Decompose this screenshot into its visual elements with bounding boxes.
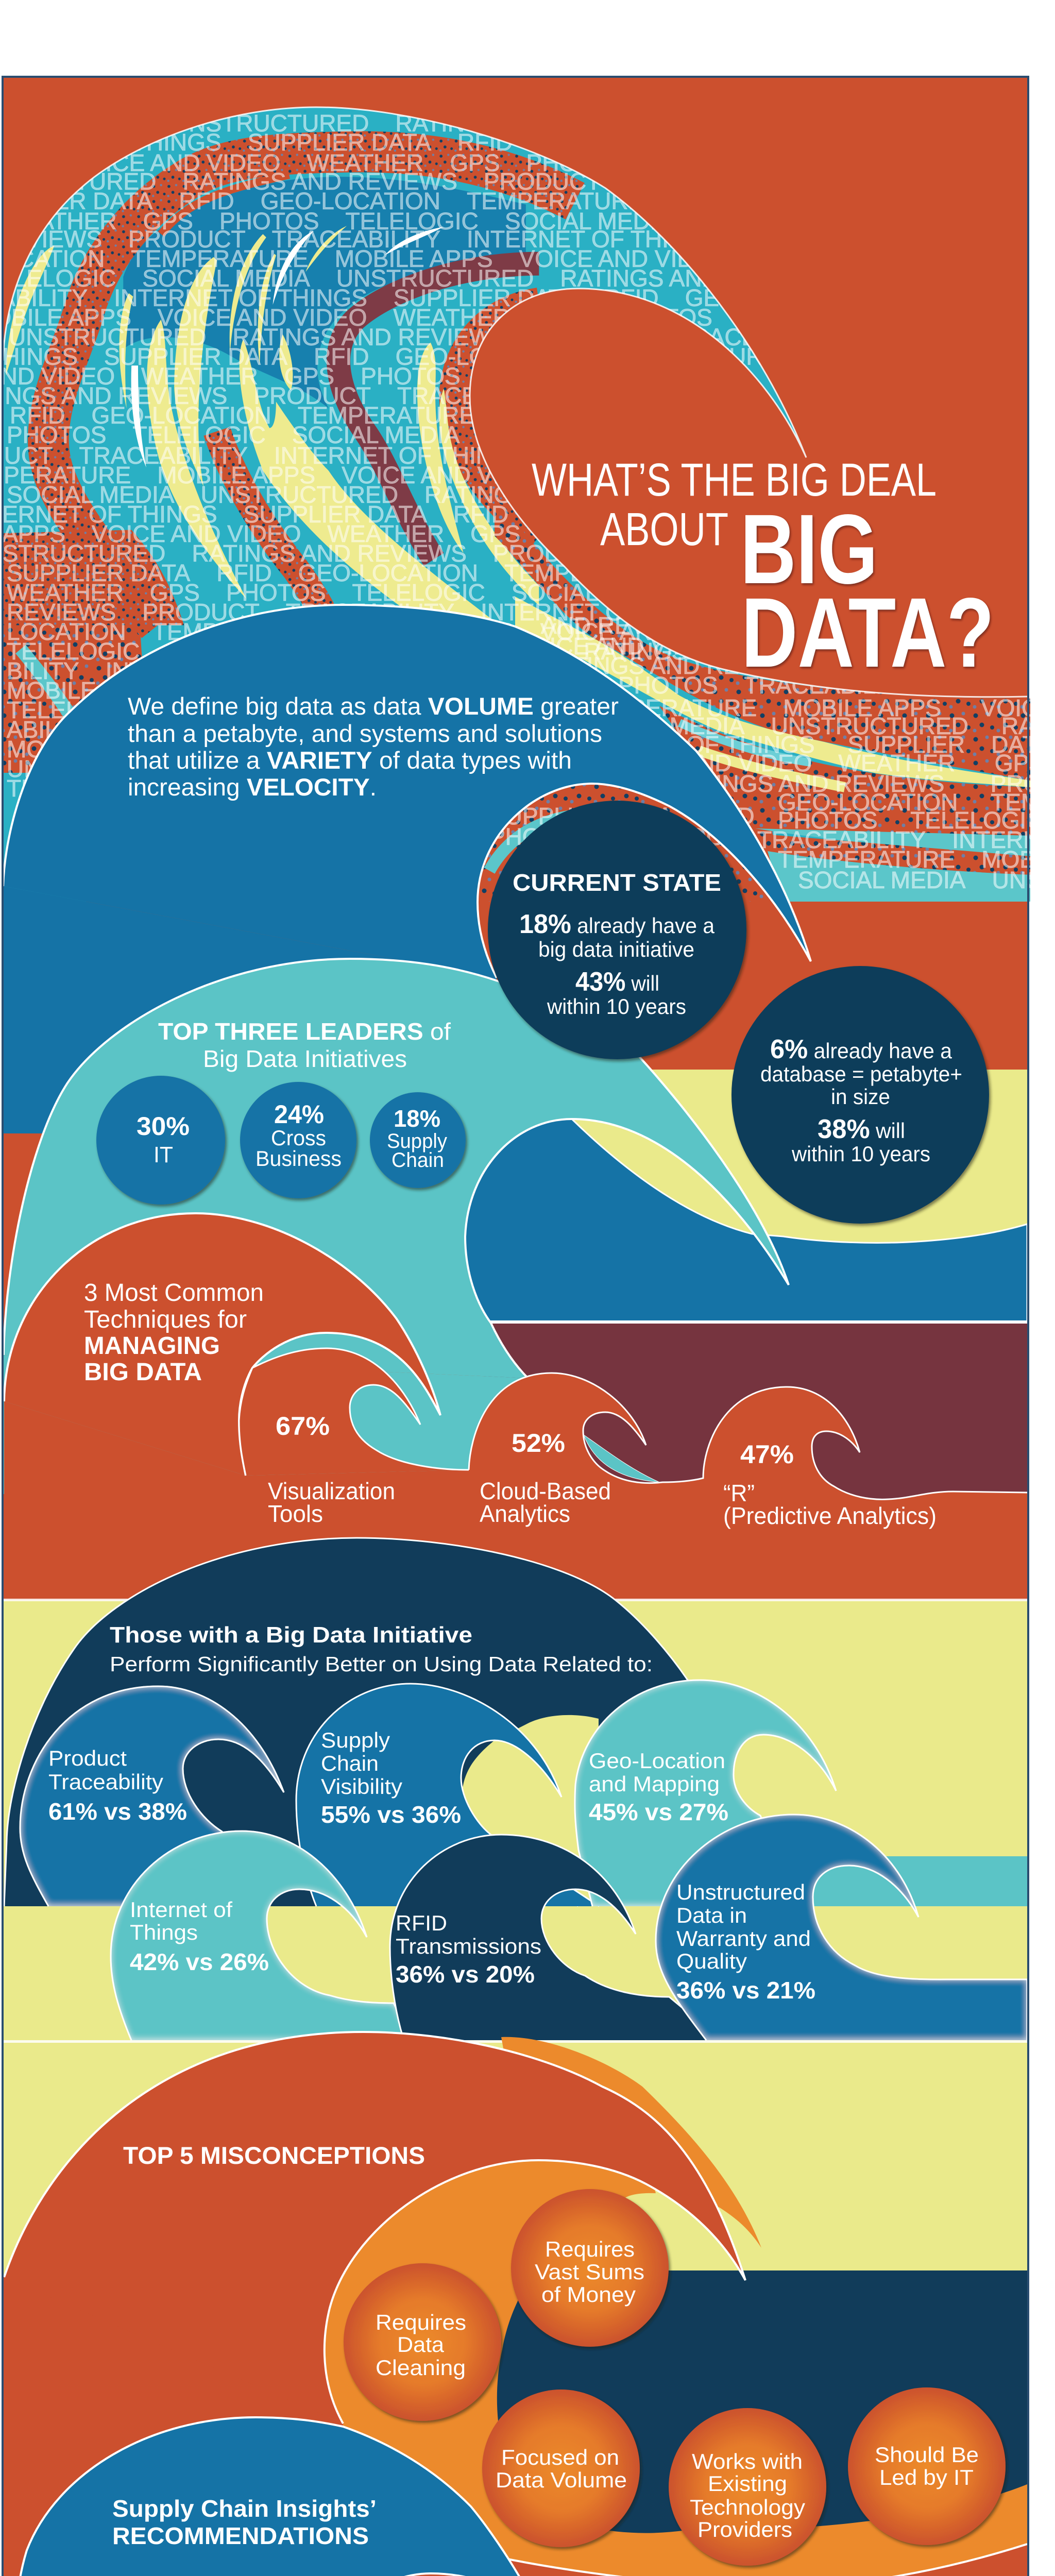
- circle: petabyte database: within 10 years: [791, 1142, 930, 1166]
- wave: geo-location: and Mapping: [589, 1772, 720, 1796]
- wave: product traceability: [20, 1686, 284, 1906]
- wave: product traceability: 61% vs 38%: [48, 1798, 187, 1825]
- data words flowing through the wave: TELELOGIC SOCIAL: [7, 697, 253, 723]
- maroon band: [484, 1320, 1027, 1502]
- data words flowing through the wave: REVIEWS PRODUCT TRACEABILITY INTERNET OF THINGS SUPPLIER: [7, 599, 877, 625]
- yellow crest behind waves: [462, 1715, 599, 1906]
- wave: internet of things: [111, 1831, 412, 2040]
- navy initiative wave: [4, 1538, 721, 1906]
- data words flowing through the wave: UNSTRUCTURED RATINGS AND REVIEWS PRODUCT TRACEABILITY: [9, 324, 846, 350]
- data words flowing through the wave: PHOTOS TELELOGIC: [489, 823, 748, 850]
- sphere: requires vast sums of money: [511, 2189, 669, 2347]
- wave: unstructured data: Quality: [676, 1949, 747, 1973]
- circle: cross business: Business: [256, 1146, 342, 1171]
- sphere: requires vast sums of money: of Money: [541, 2282, 636, 2307]
- waves: cloud-based analytics and R: Cloud-Based: [480, 1478, 611, 1504]
- techniques heading: Techniques for: [84, 1306, 247, 1333]
- data words flowing through the wave: RFID GEO-LOCATION TEMPERATURE MOBILE APPS: [10, 402, 659, 429]
- circle: current state: 18% already have a: [519, 909, 715, 939]
- definition text: that utilize a VARIETY of data types with: [128, 747, 572, 774]
- sphere: requires data cleaning: [344, 2263, 501, 2421]
- data words flowing through the wave: VOICE AND VIDEO WEATHER GPS: [603, 750, 1045, 776]
- wave: visualization tools: [239, 1348, 469, 1600]
- techniques heading: MANAGING: [84, 1332, 220, 1360]
- sphere: works with existing technology providers: Technology: [690, 2495, 805, 2519]
- recommendations heading: [112, 2495, 377, 2549]
- initiative heading: Perform Significantly Better on Using Data Related to:: [110, 1652, 653, 1676]
- data words flowing through the wave: UNSTRUCTURED RATINGS AND REVIEWS: [172, 110, 670, 137]
- waves: cloud-based analytics and R: “R”: [723, 1480, 755, 1506]
- red lower band: [3, 2421, 1027, 2576]
- data words flowing through the wave: UNSTRUCTURED: [7, 755, 204, 782]
- sphere: requires vast sums of money: Requires: [545, 2237, 635, 2261]
- initiative heading: Those with a Big Data Initiative: [110, 1622, 472, 1648]
- wave: geo-location: Geo-Location: [589, 1749, 725, 1773]
- data words flowing through the wave: WEATHER GPS PHOTOS TELELOGIC SOCIAL MEDIA UNSTRUCTURED: [0, 208, 896, 234]
- initiative heading: [110, 1622, 653, 1676]
- data words flowing through the wave: ABILITY: [7, 716, 95, 743]
- definition text: than a petabyte, and systems and solutions: [128, 720, 602, 747]
- red misconceptions wave: [4, 2032, 745, 2576]
- circle: supply chain: 18%: [394, 1105, 440, 1132]
- title: WHAT’S THE BIG DEAL: [532, 454, 937, 506]
- data words flowing through the wave: MOBILE APPS VOICE AND VIDEO: [7, 677, 400, 704]
- wave: unstructured data: Unstructured: [676, 1880, 805, 1904]
- teal leaders wave: [4, 959, 789, 1494]
- sphere: works with existing technology providers: [669, 2408, 826, 2566]
- wave: product traceability: Product: [48, 1746, 127, 1770]
- circle: petabyte database: [731, 966, 989, 1224]
- wave: RFID: [390, 1835, 721, 2040]
- waves: cloud-based analytics and R: Analytics: [480, 1500, 570, 1527]
- title: DATA?: [741, 577, 994, 688]
- data words flowing through the wave: TELELOGIC SOCIAL MEDIA UNSTRUCTURED RATINGS: [7, 638, 687, 665]
- data words flowing through the wave: BILITY INTERNET OF THINGS SUPPLIER DATA: [7, 657, 569, 684]
- data words flowing through the wave: PHOTOS TELELOGIC: [778, 807, 1044, 834]
- circle: cross business: 24%: [274, 1100, 324, 1129]
- circle: current state: within 10 years: [547, 994, 686, 1019]
- waves: cloud-based analytics and R: (Predictive Analytics): [723, 1502, 937, 1529]
- sphere: requires vast sums of money: Vast Sums: [535, 2260, 644, 2284]
- circle: petabyte database: database = petabyte+: [760, 1062, 962, 1086]
- wave: unstructured data: 36% vs 21%: [676, 1977, 815, 2004]
- waves: cloud-based analytics and R: 52%: [512, 1429, 565, 1458]
- wave: unstructured data: Warranty and: [676, 1926, 811, 1951]
- circle: current state: CURRENT STATE: [513, 869, 721, 896]
- circle: petabyte database: in size: [831, 1084, 890, 1109]
- wave: RFID: 36% vs 20%: [396, 1961, 535, 1988]
- data words flowing through the wave: TEMPERATURE MOBILE APPS VOICE: [580, 694, 1054, 721]
- data words flowing through the wave: SUPPLIER DATA RFID: [489, 803, 755, 829]
- data words flowing through the wave: SUPPLIER DATA RFID GEO-LOCATION TEMPERATURE MOBILE APPS: [7, 560, 866, 586]
- wave: unstructured data: Data in: [676, 1903, 747, 1927]
- techniques heading: BIG DATA: [84, 1359, 202, 1386]
- red and yellow bands behind the blue wave: [464, 902, 1027, 1070]
- circle: current state: [488, 801, 746, 1059]
- wave: supply chain visibility: 55% vs 36%: [321, 1801, 461, 1828]
- data words flowing through the wave: LOCATION TEMPERATURE MOBILE APPS VOICE AND VIDEO: [7, 618, 750, 645]
- orange wave: [309, 2138, 1027, 2576]
- blue definition wave: [3, 605, 811, 1133]
- wave: RFID: Transmissions: [396, 1934, 541, 1958]
- navy panel behind misconceptions: [489, 2270, 1027, 2559]
- definition text: [128, 692, 619, 801]
- sphere: requires data cleaning: Cleaning: [376, 2355, 466, 2380]
- wave: supply chain visibility: Supply: [321, 1728, 390, 1752]
- wave: product traceability: Traceability: [48, 1770, 163, 1794]
- data words flowing through the wave: THINGS: [7, 775, 96, 802]
- data words flowing through the wave: MOBILE APPS: [7, 736, 165, 762]
- title: BIG: [740, 494, 878, 604]
- circle: supply chain: Supply: [387, 1130, 447, 1153]
- wave: geo-location: 45% vs 27%: [589, 1799, 728, 1825]
- circle: petabyte database: 6% already have a: [770, 1035, 952, 1064]
- sphere: requires data cleaning: Data: [397, 2332, 445, 2357]
- leaders heading: Big Data Initiatives: [203, 1045, 407, 1072]
- recommendations heading: RECOMMENDATIONS: [112, 2522, 369, 2549]
- sphere: should be led by IT: [848, 2387, 1006, 2545]
- circle: cross business: [240, 1082, 356, 1198]
- data words flowing through the wave: AND VIDEO WEATHER GPS PHOTOS TELELOGIC: [0, 363, 620, 389]
- data words flowing through the wave: SOCIAL MEDIA UNSTRUCTURED RATINGS AND REVIEWS PRODUCT: [7, 481, 843, 508]
- circle: current state: 43% will: [575, 967, 659, 997]
- hero wave made of data words: [0, 103, 1055, 907]
- sphere: should be led by IT: Led by IT: [879, 2465, 974, 2489]
- definition text: We define big data as data VOLUME greater: [128, 692, 619, 720]
- data words flowing through the wave: INTERNET OF THINGS SUPPLIER DATA: [561, 731, 1051, 758]
- circle: petabyte database: 38% will: [818, 1114, 905, 1144]
- circle: IT: IT: [154, 1142, 173, 1167]
- leaders heading: TOP THREE LEADERS of: [158, 1018, 451, 1045]
- data words flowing through the wave: VOICE AND VIDEO WEATHER GPS PHOTOS TELELOGIC: [71, 149, 785, 176]
- data words flowing through the wave: TELELOGIC SOCIAL MEDIA UNSTRUCTURED RATINGS AND REVIEWS: [0, 265, 835, 292]
- sphere: should be led by IT: Should Be: [875, 2443, 979, 2467]
- definition text: increasing VELOCITY.: [128, 773, 377, 801]
- circle: supply chain: [370, 1092, 466, 1188]
- wave: unstructured data: [656, 1815, 1027, 2040]
- wave: internet of things: Things: [130, 1920, 198, 1944]
- wave: supply chain visibility: [296, 1684, 599, 1906]
- wave: visualization tools: 67%: [276, 1412, 330, 1440]
- title: ABOUT: [600, 504, 728, 555]
- waves: cloud-based analytics and R: 47%: [740, 1440, 794, 1469]
- orange crest sliver: [501, 2037, 761, 2248]
- hero wave outline: [3, 107, 1027, 697]
- sphere: focused on data volume: Data Volume: [496, 2468, 627, 2492]
- data words flowing through the wave: THINGS SUPPLIER DATA RFID GEO-LOCATION TEMPERATURE: [0, 343, 779, 370]
- circle: cross business: Cross: [271, 1126, 326, 1150]
- sphere: focused on data volume: Focused on: [501, 2445, 619, 2469]
- sphere: works with existing technology providers: Existing: [708, 2471, 787, 2496]
- sphere: works with existing technology providers: Providers: [697, 2517, 792, 2541]
- sphere: requires data cleaning: Requires: [376, 2310, 466, 2334]
- data words flowing through the wave: AND REVIEWS PRODUCT GEO: [541, 612, 929, 639]
- red techniques wave: [4, 1213, 440, 1600]
- blue lower-right wave: [465, 1119, 1027, 1322]
- wave: RFID: RFID: [396, 1911, 447, 1935]
- techniques heading: 3 Most Common: [84, 1279, 264, 1307]
- sphere: works with existing technology providers: Works with: [692, 2449, 803, 2473]
- techniques heading: [84, 1279, 264, 1386]
- teal right band: [773, 1856, 1027, 1906]
- circle: current state: big data initiative: [538, 937, 694, 961]
- wave: visualization tools: Tools: [268, 1500, 323, 1527]
- wave: supply chain visibility: Chain: [321, 1751, 379, 1775]
- recommendations heading: Supply Chain Insights’: [112, 2495, 377, 2522]
- blue recommendations wave: [13, 2417, 1027, 2576]
- misconceptions heading: TOP 5 MISCONCEPTIONS: [123, 2142, 425, 2169]
- wave: internet of things: Internet of: [130, 1897, 232, 1922]
- data words flowing through the wave: OF THINGS SUPPLIER DATA RFID GEO-LOCATION: [93, 129, 719, 156]
- wave: visualization tools: Visualization: [268, 1478, 395, 1504]
- circle: supply chain: Chain: [392, 1149, 444, 1172]
- wave: internet of things: 42% vs 26%: [130, 1948, 269, 1975]
- waves: cloud-based analytics and R: [469, 1373, 1027, 1600]
- wave: supply chain visibility: Visibility: [321, 1774, 402, 1799]
- leaders heading: [158, 1018, 451, 1072]
- yellow band: [3, 1599, 1027, 2275]
- data words flowing through the wave: [0, 110, 1055, 893]
- title: [532, 454, 994, 688]
- wave: geo-location: [575, 1680, 836, 1906]
- data words flowing through the wave: WEATHER GPS PHOTOS TELELOGIC SOCIAL MEDIA UNSTRUCTURED: [7, 579, 903, 606]
- circle: IT: [96, 1076, 225, 1205]
- sphere: focused on data volume: [482, 2389, 640, 2547]
- data words flowing through the wave: PHOTOS TELELOGIC SOCIAL MEDIA UNSTRUCTURED: [7, 421, 684, 448]
- circle: IT: 30%: [137, 1112, 190, 1141]
